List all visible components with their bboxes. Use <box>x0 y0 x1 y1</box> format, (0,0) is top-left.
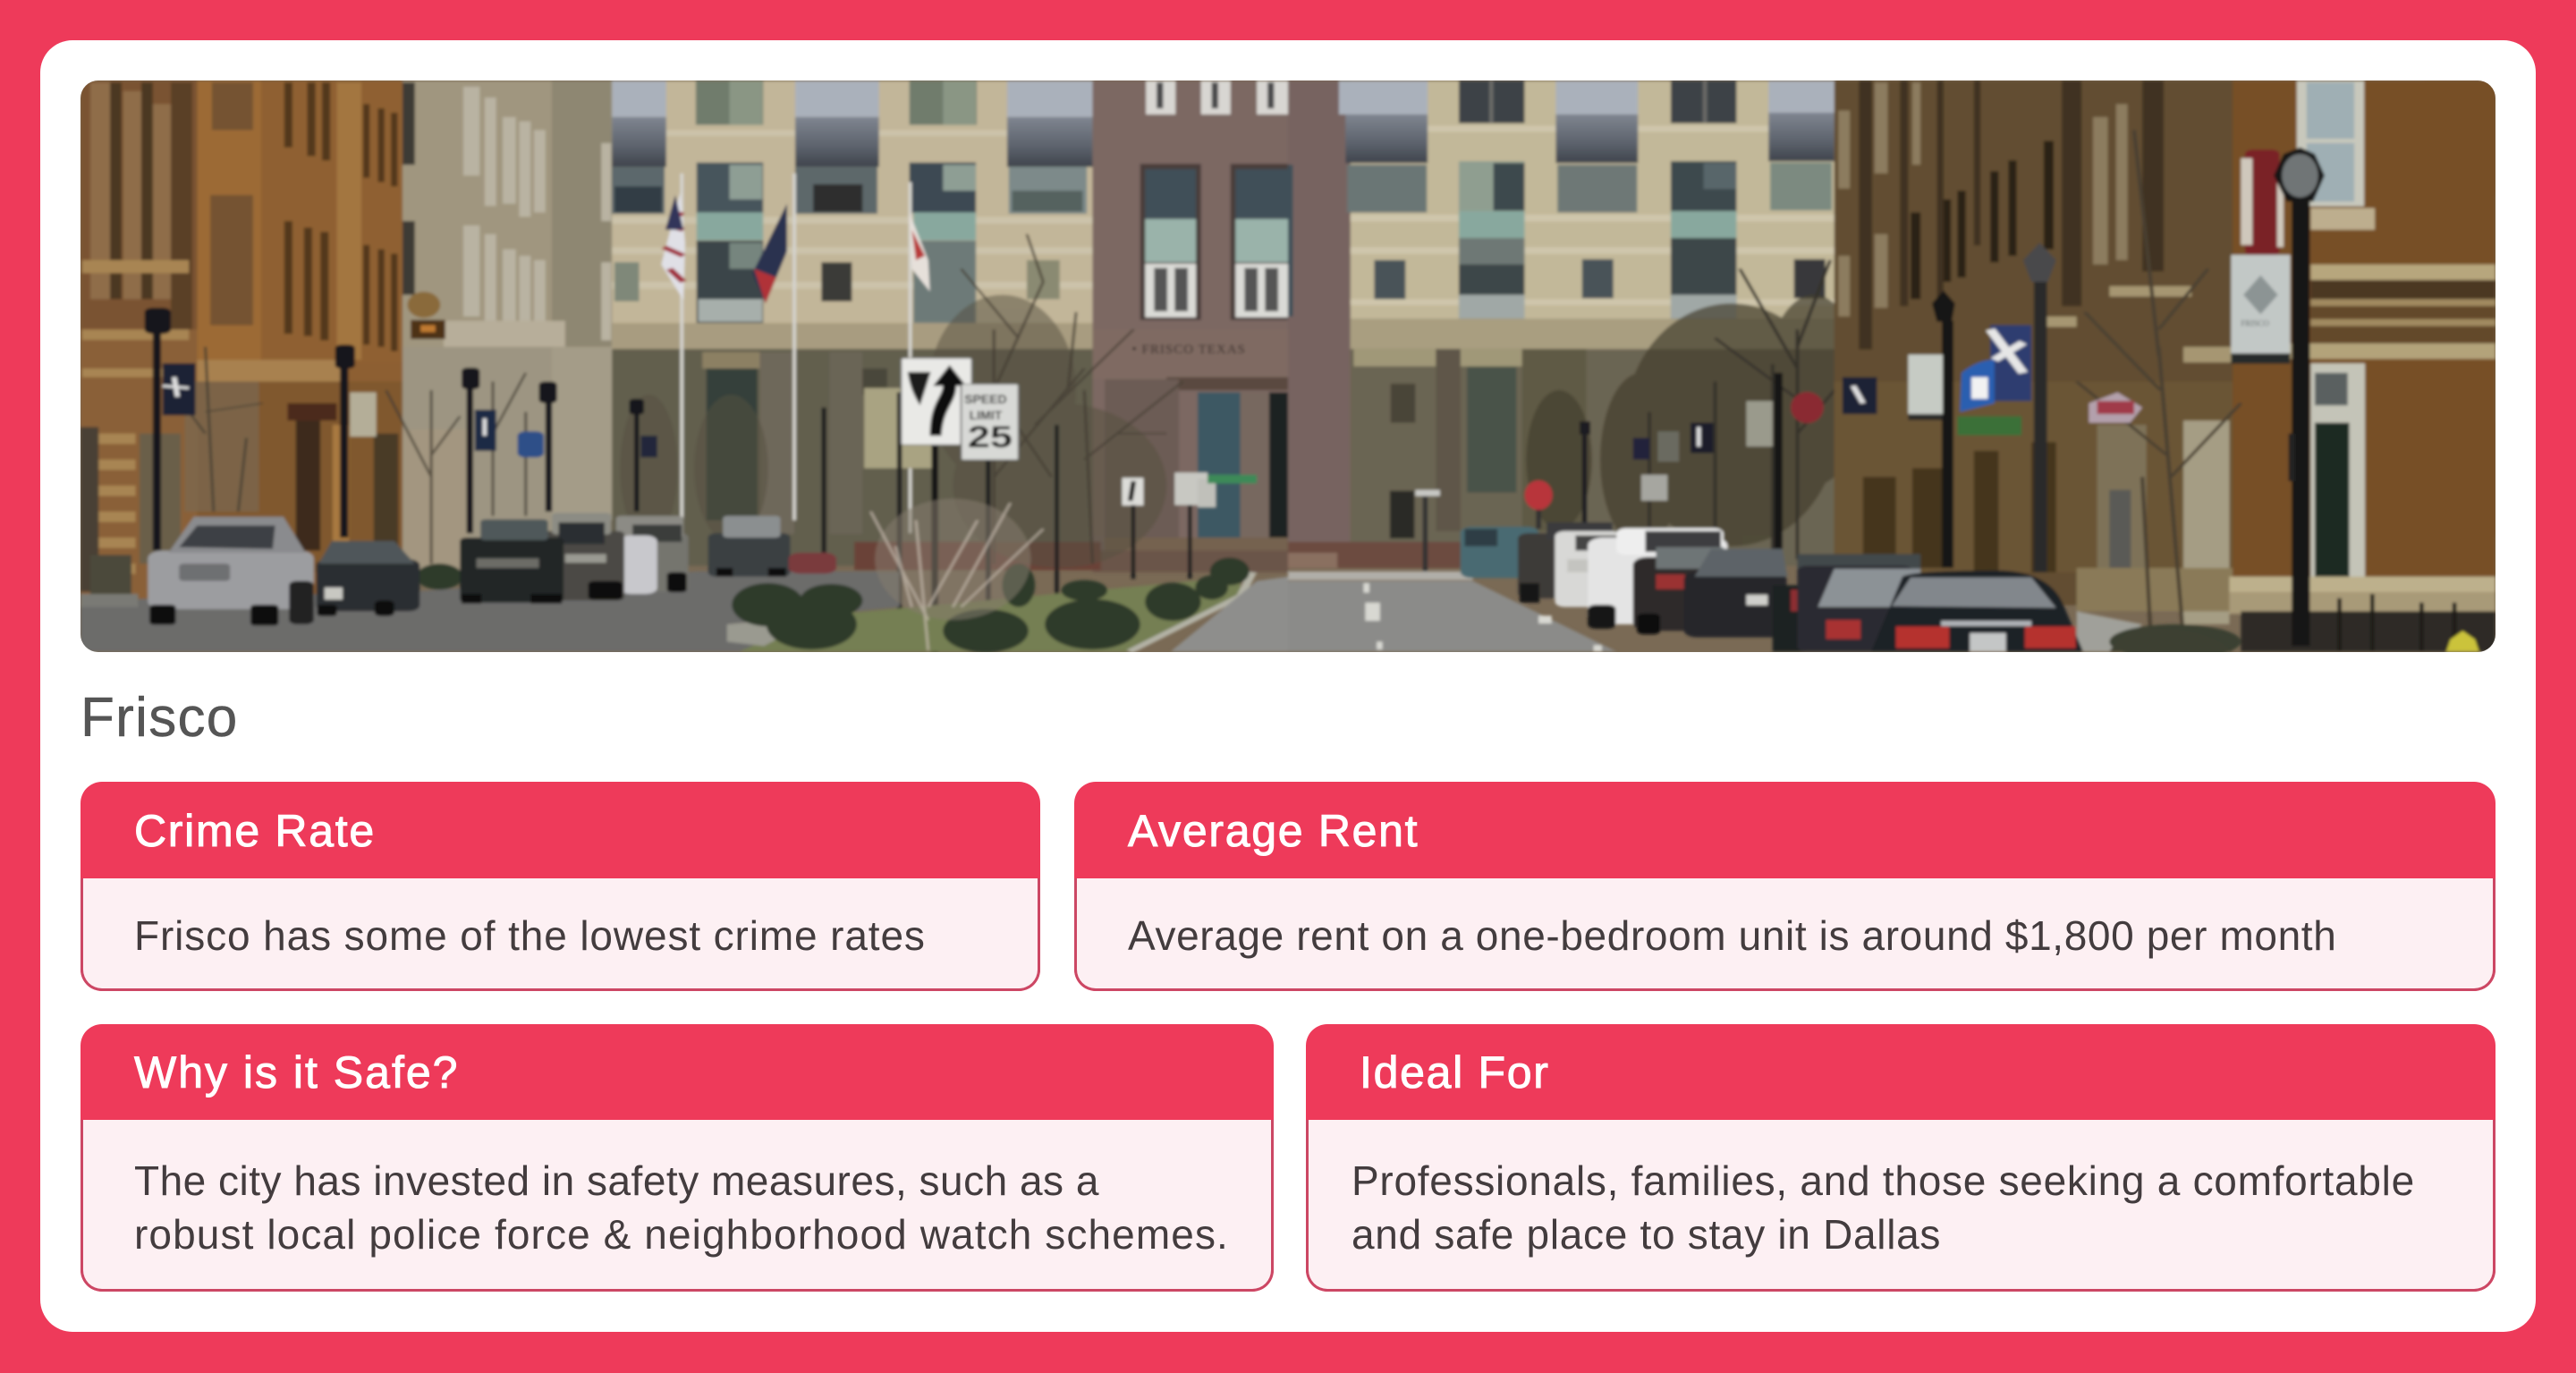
road signs: 25 <box>968 420 1013 454</box>
panel body: Crime Rate <box>80 878 1040 991</box>
road signs: SPEED <box>964 392 1007 406</box>
white lamp banner: FRISCO <box>2241 318 2269 327</box>
gray building <box>402 81 624 572</box>
bushes <box>417 557 1250 652</box>
photo: Frisco street with city hall <box>80 81 2496 652</box>
heading: Ideal For: Ideal For <box>1360 1047 1550 1098</box>
panel body: Ideal For <box>1306 1120 2496 1292</box>
text: safety body: robust local police force & neighborhood watch schemes. <box>134 1211 1229 1258</box>
lamp posts <box>145 308 644 551</box>
text: safety body <box>134 1157 1229 1258</box>
cars right <box>1461 522 2083 652</box>
panel body: Why is it Safe? <box>80 1120 1274 1292</box>
text: safety body: The city has invested in safety measures, such as a <box>134 1157 1099 1204</box>
text: average rent body: Average rent on a one-bedroom unit is around $1,800 per month <box>1128 912 2336 959</box>
trees behind <box>173 234 1182 568</box>
background trees right <box>1526 260 1879 559</box>
front trees <box>2077 130 2241 638</box>
brick building <box>2229 81 2496 652</box>
tower <box>854 81 1288 572</box>
engraved text: • FRISCO TEXAS <box>1132 343 1246 357</box>
heading: Crime Rate: Crime Rate <box>134 806 376 856</box>
road signs <box>821 358 1257 652</box>
iron fence <box>2109 594 2454 652</box>
tower and tan building, right part <box>1288 81 1836 568</box>
road signs: LIMIT <box>970 408 1003 422</box>
hydrant <box>2446 631 2479 652</box>
road and median <box>80 555 1288 652</box>
cars left <box>148 513 836 625</box>
tan city-hall building <box>612 81 1097 566</box>
text: ideal for body: Professionals, families, and those seeking a comfortable <box>1352 1157 2415 1204</box>
lamps <box>1775 148 2325 646</box>
white lamp banner <box>2231 255 2290 364</box>
title: Frisco: Frisco <box>80 687 239 749</box>
brown building right <box>1835 81 2237 624</box>
panel: Average Rent <box>1074 782 2496 991</box>
heading: Why is it Safe?: Why is it Safe? <box>134 1047 459 1098</box>
stop sign and far lamp <box>1415 421 1590 577</box>
text: crime rate body: Frisco has some of the lowest crime rates <box>134 912 926 959</box>
banners right <box>1633 326 2142 501</box>
brown building <box>80 81 402 601</box>
heading: Average Rent: Average Rent <box>1128 806 1419 856</box>
flags and poles <box>661 174 930 533</box>
panel: Ideal For <box>1306 1024 2496 1292</box>
panel: Why is it Safe? <box>80 1024 1274 1292</box>
panel: Crime Rate <box>80 782 1040 991</box>
panel body: Average Rent <box>1074 878 2496 991</box>
text: ideal for body <box>1352 1157 2415 1258</box>
road right <box>1288 572 2241 659</box>
pale shrub <box>871 498 1043 650</box>
banners <box>163 363 657 457</box>
text: ideal for body: and safe place to stay in Dallas <box>1352 1211 1941 1258</box>
